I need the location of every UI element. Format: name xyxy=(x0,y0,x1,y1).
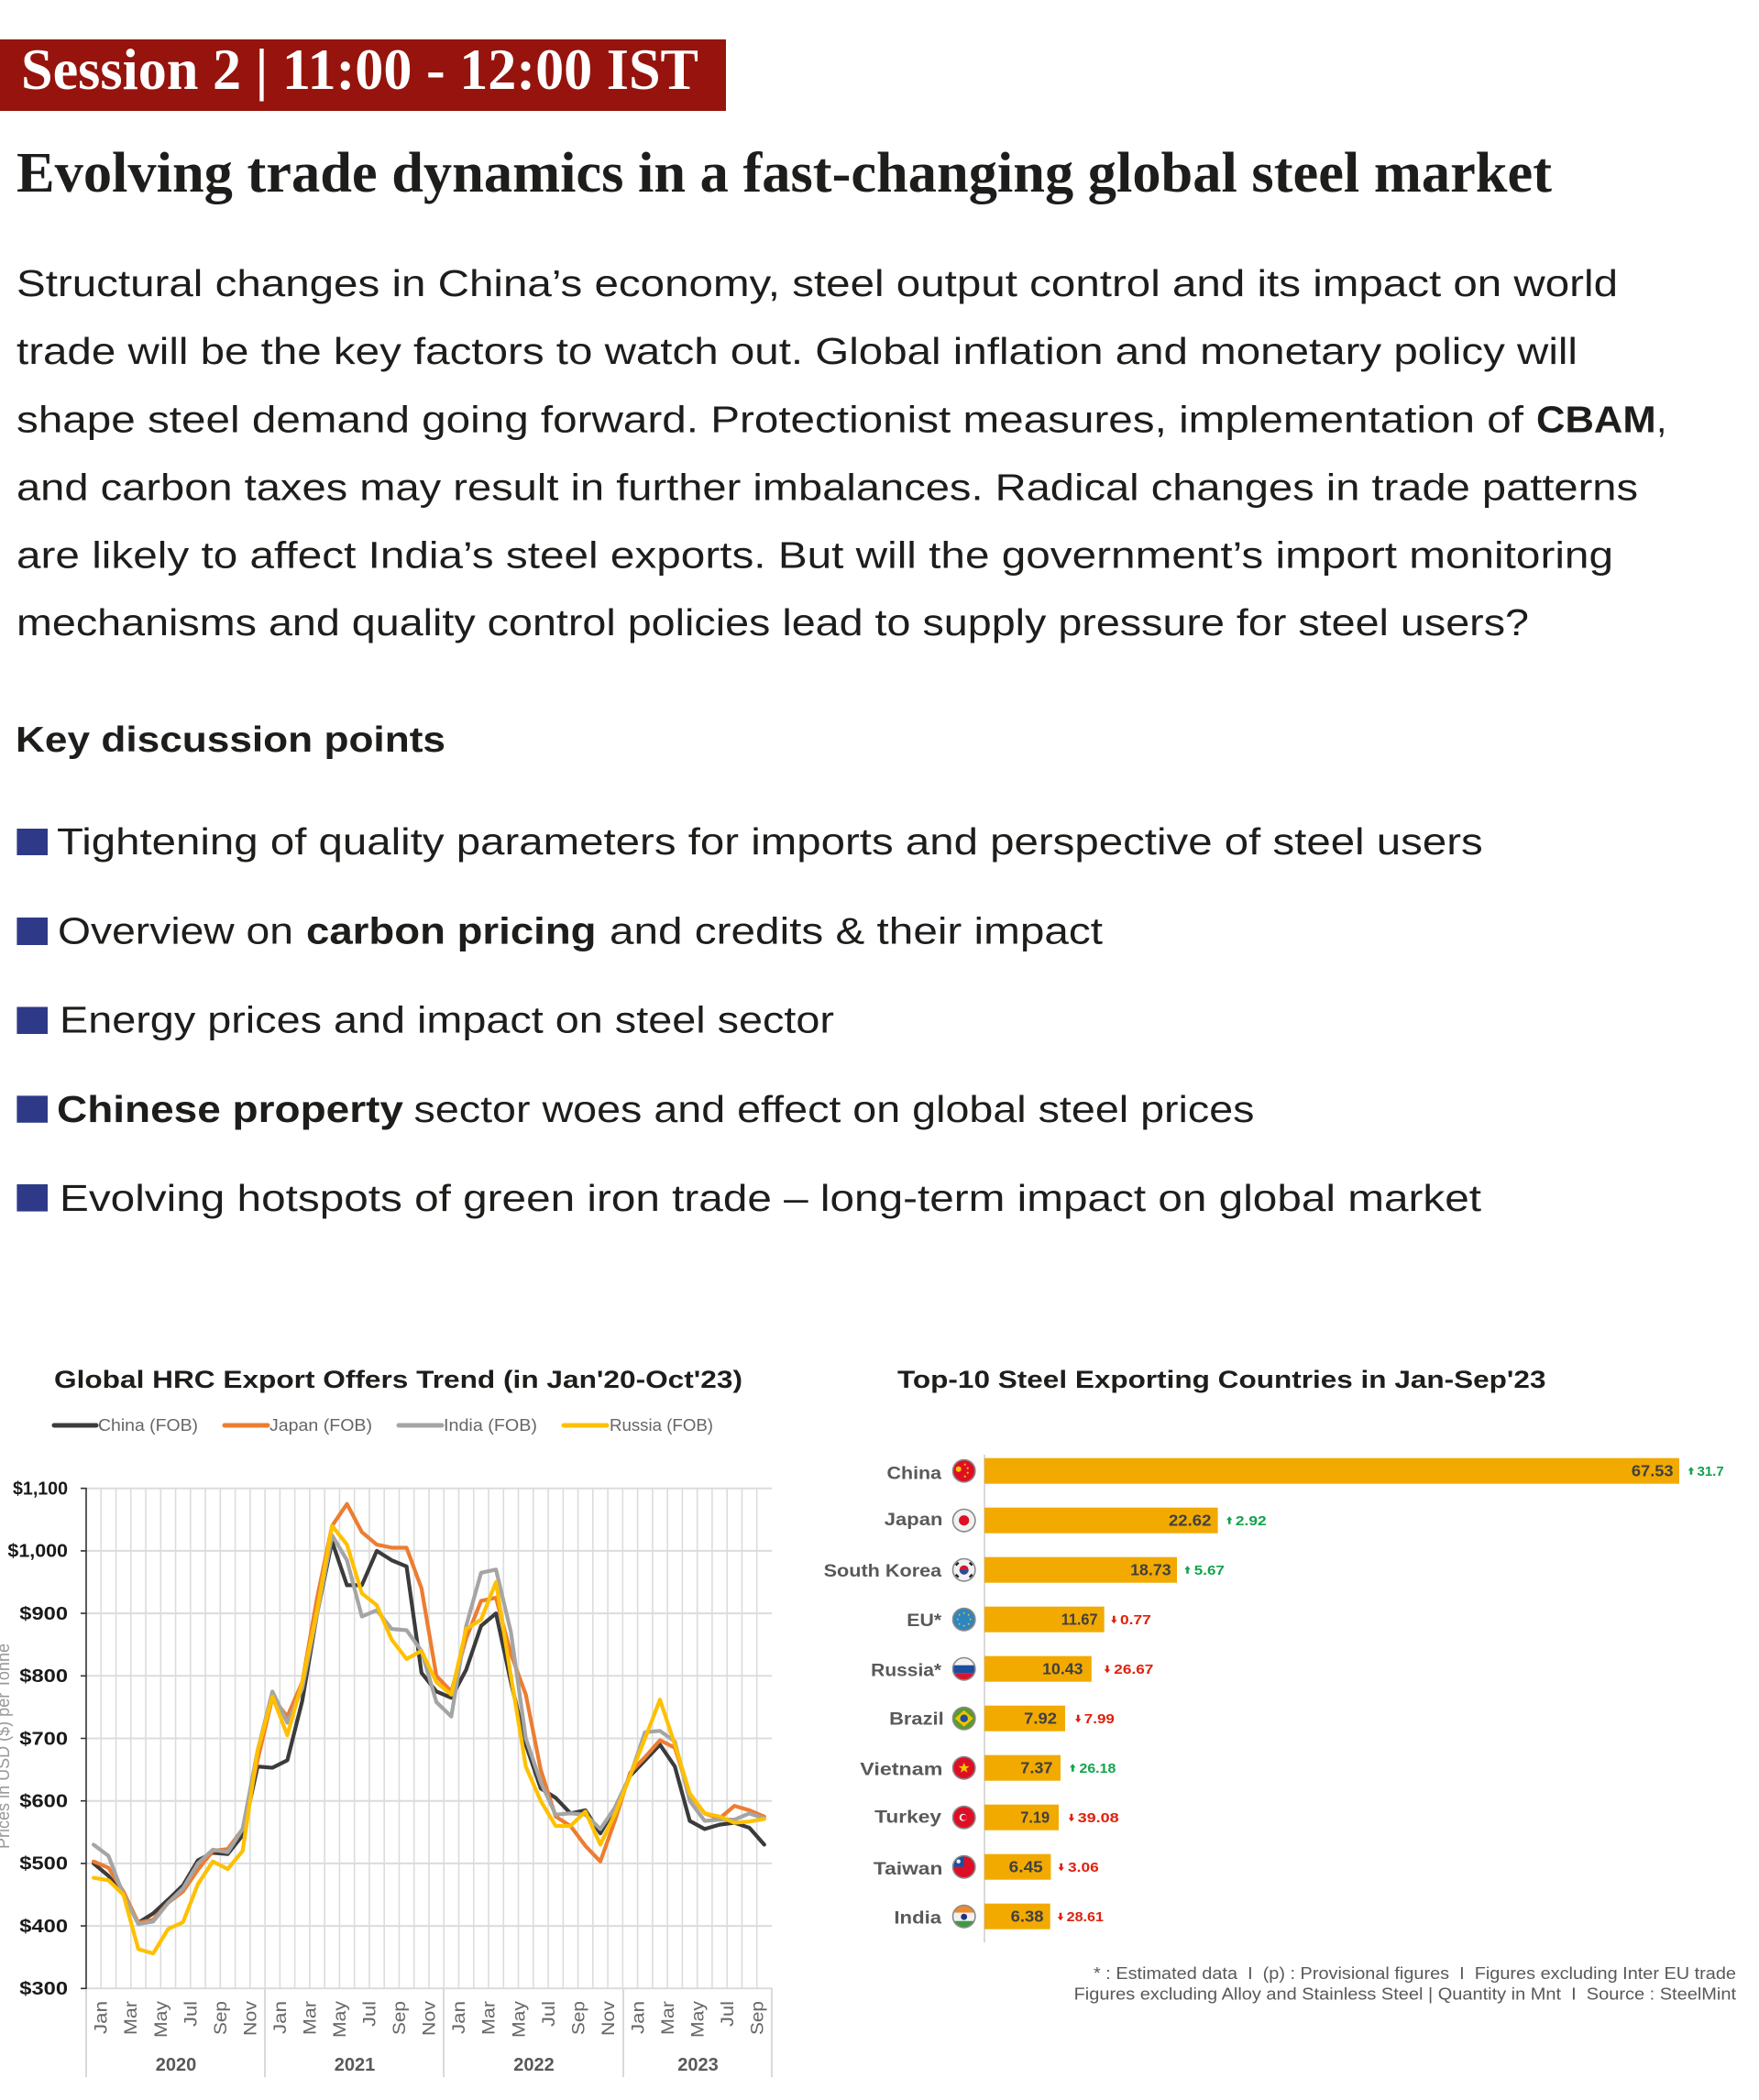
icon: Taiwan flag xyxy=(952,1855,976,1879)
month labels: Jul xyxy=(540,2001,559,2027)
y axis labels xyxy=(7,1479,68,1999)
row: Brazil: 7.92 xyxy=(1024,1710,1057,1728)
bullet 3: Energy prices and impact on steel sector xyxy=(60,999,834,1041)
row: Turkey xyxy=(874,1805,1119,1831)
row: South Korea: South Korea xyxy=(824,1561,941,1581)
row: Vietnam: 7.37 xyxy=(1020,1759,1052,1777)
row: South Korea: 5.67 xyxy=(1194,1563,1225,1578)
intro paragraph: CBAM xyxy=(1536,399,1656,441)
icon: China flag xyxy=(952,1459,976,1483)
price series lines xyxy=(93,1504,764,1953)
month labels: Jan xyxy=(93,2001,112,2034)
bullet 4: Chinese property xyxy=(57,1088,403,1130)
footnote: Figures excluding Alloy and Stainless Steel | Quantity in Mnt I Source : SteelMint xyxy=(1074,1985,1736,2004)
month labels: Jan xyxy=(450,2001,469,2034)
row: Russia: Russia* xyxy=(871,1660,942,1680)
y axis labels: $800 xyxy=(19,1666,68,1687)
y axis labels: $700 xyxy=(19,1729,68,1749)
intro paragraph xyxy=(16,262,1666,643)
month labels: Jan xyxy=(629,2001,648,2034)
intro paragraph: , xyxy=(1656,399,1666,441)
series: Russia xyxy=(93,1526,764,1953)
year labels: 2022 xyxy=(513,2055,555,2075)
month labels: Nov xyxy=(421,2000,440,2036)
row: Turkey: 39.08 xyxy=(1078,1810,1119,1826)
intro paragraph: are likely to affect India’s steel exports. But will the government’s import monitoring xyxy=(16,533,1613,576)
line chart title: Global HRC Export Offers Trend (in Jan'20-Oct'23) xyxy=(54,1366,742,1393)
row: EU xyxy=(907,1607,1151,1633)
row: Brazil: 7.99 xyxy=(1084,1711,1115,1727)
line chart legend: Russia (FOB) xyxy=(610,1416,713,1435)
row: China: 67.53 xyxy=(1632,1462,1674,1480)
y axis labels: $300 xyxy=(19,1979,68,1999)
month labels: May xyxy=(510,2000,529,2038)
row: Japan: 2.92 xyxy=(1236,1513,1267,1529)
row: Taiwan: 3.06 xyxy=(1068,1860,1099,1875)
row: South Korea: 18.73 xyxy=(1130,1561,1171,1579)
y axis labels: $900 xyxy=(19,1604,68,1624)
row: India: 6.38 xyxy=(1011,1908,1044,1926)
series: China xyxy=(93,1542,764,1923)
session banner: Session 2 | 11:00 - 12:00 IST xyxy=(21,37,698,102)
row: Brazil xyxy=(889,1706,1115,1732)
y axis labels: $1,100 xyxy=(13,1479,68,1500)
bullet 2: carbon pricing xyxy=(306,910,596,952)
bullet 1: Tightening of quality parameters for imports and perspective of steel users xyxy=(57,820,1483,863)
intro paragraph: and carbon taxes may result in further imbalances. Radical changes in trade patterns xyxy=(16,466,1638,508)
month labels: May xyxy=(689,2000,708,2038)
row: India xyxy=(894,1904,1104,1930)
y axis labels: $1,000 xyxy=(7,1542,68,1562)
row: Russia xyxy=(871,1656,1153,1682)
row: China: China xyxy=(887,1463,941,1483)
row: EU: 0.77 xyxy=(1120,1612,1151,1628)
month labels: May xyxy=(152,2000,171,2038)
intro paragraph: trade will be the key factors to watch out. Global inflation and monetary policy will xyxy=(16,330,1578,372)
icon: South Korea flag xyxy=(952,1558,976,1582)
row: Turkey: Turkey xyxy=(874,1807,941,1827)
year labels: 2020 xyxy=(156,2055,196,2075)
line chart legend: Japan (FOB) xyxy=(269,1416,372,1435)
footnote: * : Estimated data I (p) : Provisional figures I Figures excluding Inter EU trade xyxy=(1094,1964,1736,1983)
bullet 2: Overview on xyxy=(58,910,293,952)
bullet 2: and credits & their impact xyxy=(610,910,1104,952)
bar chart title: Top-10 Steel Exporting Countries in Jan-Sep'23 xyxy=(897,1366,1545,1393)
line chart panel: Global HRC export offers xyxy=(0,1366,772,2077)
row: Japan xyxy=(885,1508,1267,1534)
row: Vietnam: Vietnam xyxy=(860,1760,942,1780)
row: Taiwan: Taiwan xyxy=(874,1859,942,1879)
row: China: 31.7 xyxy=(1698,1464,1724,1479)
row: Brazil: Brazil xyxy=(889,1709,944,1729)
icon: Turkey flag xyxy=(952,1806,976,1830)
bar chart panel: top-10 steel exporting countries xyxy=(824,1366,1736,2004)
line chart legend: India (FOB) xyxy=(444,1416,537,1435)
bullet list xyxy=(16,820,1483,1219)
month labels: Jul xyxy=(719,2001,738,2027)
row: Turkey: 7.19 xyxy=(1020,1809,1050,1827)
row: Vietnam: 26.18 xyxy=(1080,1761,1116,1776)
row: India: India xyxy=(894,1908,941,1928)
intro paragraph: Structural changes in China’s economy, steel output control and its impact on world xyxy=(16,262,1618,304)
icon: Brazil flag xyxy=(952,1707,976,1731)
month labels: Jul xyxy=(361,2001,380,2027)
row: Taiwan: 6.45 xyxy=(1009,1858,1043,1876)
row: Vietnam xyxy=(860,1755,1116,1781)
title: Evolving trade dynamics in a fast-changing global steel market xyxy=(16,142,1552,204)
row: EU: 11.67 xyxy=(1061,1611,1098,1629)
row: EU: EU* xyxy=(907,1611,942,1631)
line chart legend xyxy=(54,1416,713,1435)
month labels: Mar xyxy=(301,2000,321,2035)
month labels: Mar xyxy=(659,2000,678,2035)
y axis labels: $500 xyxy=(19,1854,68,1875)
intro paragraph: shape steel demand going forward. Protectionist measures, implementation of xyxy=(16,399,1524,441)
series: Japan xyxy=(93,1504,764,1923)
icon: Vietnam flag xyxy=(952,1756,976,1780)
bullet 5: Evolving hotspots of green iron trade – long-term impact on global market xyxy=(60,1177,1482,1219)
month labels: Jul xyxy=(181,2001,201,2027)
line chart legend: China (FOB) xyxy=(98,1416,198,1435)
icon: EU flag xyxy=(952,1608,976,1632)
y axis labels: $400 xyxy=(19,1917,68,1937)
footnote xyxy=(1074,1964,1736,2004)
row: China xyxy=(887,1458,1724,1484)
month labels: Jan xyxy=(271,2001,291,2034)
row: Russia: 10.43 xyxy=(1042,1660,1083,1678)
month labels: Sep xyxy=(390,2001,410,2035)
intro paragraph: mechanisms and quality control policies lead to supply pressure for steel users? xyxy=(16,601,1529,643)
month labels xyxy=(93,2000,768,2038)
icon: Russia flag xyxy=(952,1657,976,1681)
bullet 2 xyxy=(16,910,1104,952)
month labels: Nov xyxy=(241,2000,260,2036)
month labels: May xyxy=(331,2000,350,2038)
row: Taiwan xyxy=(874,1854,1099,1880)
month labels: Sep xyxy=(749,2001,768,2035)
year labels: 2023 xyxy=(677,2055,719,2075)
y axis labels: $600 xyxy=(19,1791,68,1811)
bullet 4 xyxy=(16,1088,1254,1130)
row: Japan: Japan xyxy=(885,1510,942,1530)
year labels xyxy=(156,2055,719,2075)
month labels: Mar xyxy=(122,2000,141,2035)
bullet 4: sector woes and effect on global steel prices xyxy=(414,1088,1254,1130)
row: Russia: 26.67 xyxy=(1114,1662,1153,1677)
row: South Korea xyxy=(824,1557,1225,1583)
month labels: Sep xyxy=(212,2001,231,2035)
month labels: Mar xyxy=(480,2000,500,2035)
month labels: Sep xyxy=(569,2001,588,2035)
row: India: 28.61 xyxy=(1067,1909,1104,1925)
series: India xyxy=(93,1535,764,1924)
icon: Japan flag xyxy=(952,1509,976,1533)
icon: India flag xyxy=(952,1905,976,1929)
month labels: Nov xyxy=(599,2000,619,2036)
year labels: 2021 xyxy=(335,2055,375,2075)
heading: key discussion points: Key discussion points xyxy=(16,720,445,760)
row: Japan: 22.62 xyxy=(1169,1512,1212,1530)
